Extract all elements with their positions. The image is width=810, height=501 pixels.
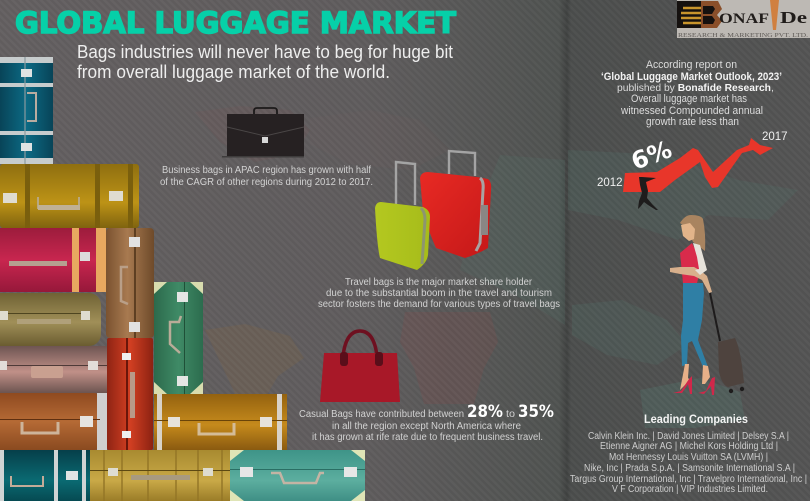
text: travel bags: sector fosters the demand for various types of travel bags bbox=[318, 299, 560, 310]
red top bbox=[680, 243, 700, 283]
text: report summary: witnessed Compounded annual bbox=[620, 105, 763, 117]
suitcase: gold bbox=[90, 450, 230, 501]
text: report summary: According report on bbox=[646, 59, 737, 71]
text: report summary: Overall luggage market has bbox=[631, 93, 747, 105]
suitcase: yellow bbox=[0, 164, 139, 228]
label: 2017: 2017 bbox=[762, 131, 788, 143]
text: business bags: Business bags in APAC region has grown with half bbox=[162, 165, 371, 176]
text: report summary: growth rate less than bbox=[646, 116, 739, 128]
suitcase: green upright bbox=[154, 282, 203, 394]
suitcase stack bbox=[0, 57, 365, 501]
face bbox=[681, 223, 695, 241]
logo: ONAF bbox=[719, 11, 769, 27]
suitcase: olive bbox=[0, 293, 101, 346]
suitcase: orange brown bbox=[0, 393, 107, 450]
text: casual bags: Casual Bags have contributed between bbox=[299, 409, 464, 420]
growth arrow chart bbox=[597, 131, 788, 210]
text: business bags: of the CAGR of other regions during 2012 to 2017. bbox=[160, 177, 373, 188]
icon: green trolley bbox=[375, 162, 430, 270]
white sleeve bbox=[693, 243, 707, 275]
hair bbox=[680, 215, 705, 251]
suitcase: teal upright bbox=[0, 57, 53, 164]
text: casual bags: it has grown at rife rate due to frequent business travel. bbox=[312, 432, 543, 443]
forearm and hand bbox=[670, 267, 712, 293]
text: company list bbox=[570, 431, 807, 495]
text: report summary: ‘Global Luggage Market Outlook, 2023’ bbox=[601, 71, 782, 83]
text: business bags bbox=[160, 165, 373, 188]
suitcase: pink bbox=[0, 346, 107, 393]
icon: briefcase bbox=[222, 108, 304, 158]
world map bbox=[195, 106, 798, 428]
text: casual bags: in all the region except North America where bbox=[332, 421, 521, 432]
label: 2012: 2012 bbox=[597, 177, 623, 189]
title: GLOBAL LUGGAGE MARKET bbox=[15, 6, 456, 40]
suitcase: brown upright bbox=[106, 228, 154, 338]
blue jeans bbox=[681, 283, 708, 367]
text: company list: V F Corporation | VIP Industries Limited. bbox=[612, 484, 768, 495]
icon: red handbag bbox=[320, 331, 400, 402]
logo: De bbox=[780, 8, 808, 27]
trolley wheels bbox=[729, 387, 744, 393]
subtitle: from overall luggage market of the world. bbox=[77, 62, 390, 82]
subtitle: Bags industries will never have to beg for huge bit bbox=[77, 42, 453, 62]
text: report summary: published by Bonafide Research, bbox=[617, 83, 774, 94]
text: casual bags: to bbox=[506, 409, 515, 420]
text: travel bags bbox=[318, 277, 560, 310]
suitcase: red upright bbox=[107, 338, 153, 450]
icon: man pushing arrow bbox=[638, 177, 658, 210]
red heels bbox=[673, 376, 715, 395]
legs bbox=[680, 364, 710, 390]
subtitle bbox=[77, 42, 453, 82]
label: 6%: 6% bbox=[627, 135, 676, 176]
arrow: red growth bbox=[623, 138, 773, 192]
suitcase: red bbox=[0, 228, 106, 292]
logo: RESEARCH & MARKETING PVT. LTD. bbox=[678, 32, 808, 39]
text: casual bags: 28% bbox=[467, 402, 503, 421]
suitcase: light teal bbox=[230, 450, 365, 501]
text: casual bags: 35% bbox=[518, 402, 554, 421]
logo bbox=[677, 0, 810, 39]
text: casual bags bbox=[299, 402, 554, 443]
text: company list: Mot Hennessy Louis Vuitton SA (LVMH) | bbox=[609, 452, 768, 463]
text: company list: Etienne Aigner AG | Michel Kors Holding Ltd | bbox=[600, 441, 778, 452]
icon: red trolley bbox=[420, 151, 491, 258]
text: travel bags: Travel bags is the major market share holder bbox=[345, 277, 533, 288]
text: report summary bbox=[601, 59, 782, 128]
text: travel bags: due to the substantial boom in the travel and tourism bbox=[326, 288, 552, 299]
brown trolley bag bbox=[718, 338, 744, 387]
suitcase: amber bbox=[154, 394, 287, 450]
suitcase: dark teal bbox=[0, 450, 90, 501]
trolley handle bbox=[710, 293, 720, 341]
heading: leading companies: Leading Companies bbox=[644, 412, 748, 426]
illustration: woman with trolley bbox=[670, 215, 744, 395]
